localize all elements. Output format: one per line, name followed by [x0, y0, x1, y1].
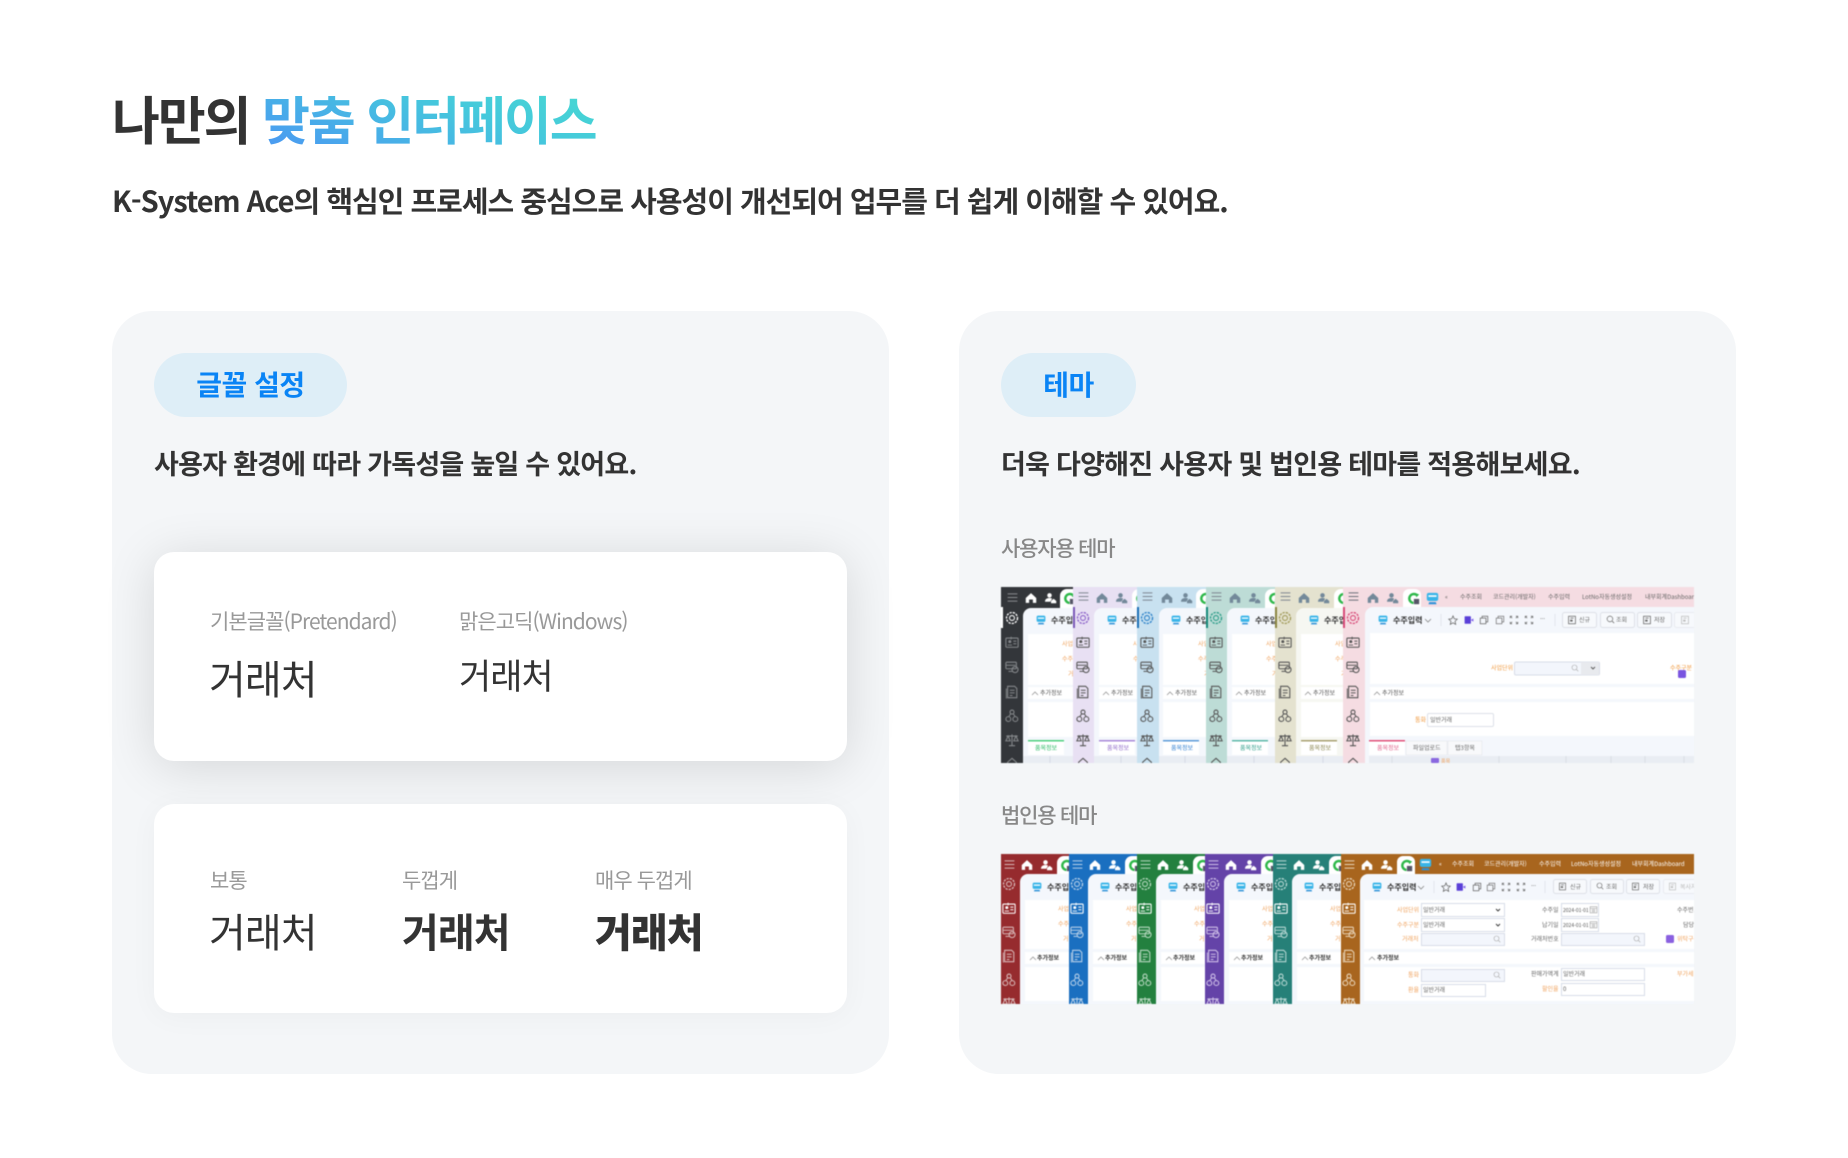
theme strip: crimson — [1001, 854, 1087, 1014]
badge: theme — [1001, 353, 1136, 417]
theme strip: green: 추가정보 — [1173, 953, 1196, 962]
window tabs: 코드관리(개발자) — [1493, 592, 1536, 601]
theme strip: mint — [1206, 587, 1295, 778]
toolbar: 신규 — [1570, 882, 1582, 891]
theme strip: mint: 사업 — [1266, 639, 1277, 648]
theme strip: dark: 추가정보 — [1040, 688, 1063, 697]
theme strip: sky blue — [1137, 587, 1226, 778]
theme strip: olive — [1275, 587, 1364, 778]
toolbar: 수주입력 — [1387, 882, 1416, 893]
description: theme: 더욱 다양해진 사용자 및 법인용 테마를 적용해보세요. — [1001, 443, 1580, 482]
theme strip: blue — [1069, 854, 1155, 1014]
window tabs: 수주조회 — [1452, 859, 1474, 868]
additional info: 판매가액계 — [1531, 969, 1559, 978]
theme strip: blue: 추가정보 — [1105, 953, 1128, 962]
description: font settings: 사용자 환경에 따라 가독성을 높일 수 있어요. — [154, 443, 637, 482]
detail tabs — [1369, 740, 1699, 765]
additional info: 할인율 — [1542, 984, 1559, 993]
screenshot stack: user themes — [1000, 586, 1694, 764]
theme strip: mint: 수주입력 — [1255, 615, 1284, 626]
theme strip: sky blue: 거 — [1204, 669, 1210, 678]
theme strip: olive: 추가정보 — [1313, 688, 1336, 697]
form card: 거래처 — [1402, 934, 1419, 943]
theme strip: crimson: 거 — [1063, 934, 1069, 943]
theme strip: mint: 거 — [1272, 669, 1278, 678]
theme strip: dark: 사업 — [1062, 639, 1073, 648]
theme strip: green — [1137, 854, 1223, 1014]
form card: 수주일 — [1542, 905, 1559, 914]
theme strip: sky blue: 추가정보 — [1175, 688, 1198, 697]
form card: 수주구분 — [1397, 920, 1420, 929]
theme strip: green: 사업 — [1194, 904, 1205, 913]
label: corporate themes: 법인용 테마 — [1001, 800, 1096, 830]
theme strip: purple: 추가정보 — [1241, 953, 1264, 962]
panel: theme — [959, 311, 1736, 1074]
theme strip: lavender: 사업 — [1133, 639, 1144, 648]
toolbar — [1373, 880, 1704, 894]
theme strip: crimson: 수주입력 — [1047, 882, 1076, 893]
label: Malgun Gothic: 맑은고딕(Windows) — [459, 606, 627, 636]
form card: 수주구분 — [1670, 663, 1693, 672]
window tabs: 코드관리(개발자) — [1484, 859, 1527, 868]
theme strip: dark: 수주입력 — [1051, 615, 1080, 626]
sample: regular: 거래처 — [209, 901, 317, 959]
theme strip: sky blue: 사업 — [1198, 639, 1209, 648]
window tabs: 수주입력 — [1539, 859, 1561, 868]
theme strip: lavender — [1073, 587, 1162, 778]
theme strip: olive: 사업 — [1335, 639, 1346, 648]
window tabs: « — [1439, 859, 1442, 868]
additional info: 부가세 — [1677, 969, 1694, 978]
form card: 납기일 — [1542, 920, 1559, 929]
theme strip: olive: 수주입력 — [1324, 615, 1353, 626]
theme strip: lavender: 품목정보 — [1107, 743, 1130, 752]
theme strip: teal: 수주입력 — [1319, 882, 1348, 893]
badge: font settings: 글꼴 설정 — [196, 364, 305, 404]
theme strip: mint: 추가정보 — [1244, 688, 1267, 697]
form card: 사업단위 — [1491, 663, 1513, 672]
theme strip: teal: 추가정보 — [1309, 953, 1332, 962]
theme strip: purple — [1205, 854, 1291, 1014]
form card — [1370, 633, 1700, 684]
window tabs: 수주조회 — [1460, 592, 1482, 601]
theme strip: teal: 사업 — [1330, 904, 1341, 913]
theme strip: purple: 수주 — [1262, 919, 1274, 928]
additional info row: 일반거래 — [1430, 715, 1452, 724]
card: font family — [154, 552, 847, 761]
window tabs: 수주입력 — [1548, 592, 1570, 601]
additional info: 통화 — [1408, 970, 1420, 979]
sample: extra bold: 거래처 — [595, 901, 703, 959]
label: default font: 기본글꼴(Pretendard) — [210, 606, 397, 636]
theme strip: crimson: 수주 — [1058, 919, 1070, 928]
sample: bold: 거래처 — [402, 901, 510, 959]
toolbar: 조회 — [1606, 882, 1617, 891]
label: bold: 두껍게 — [402, 865, 457, 895]
form card: 2024-01-01 — [1563, 907, 1589, 914]
panel: font settings — [112, 311, 889, 1074]
theme strip: teal: 거 — [1335, 934, 1341, 943]
window tabs: « — [1445, 592, 1448, 601]
detail tabs: 품목정보 — [1377, 743, 1400, 752]
detail tabs: 탭3항목 — [1455, 743, 1475, 752]
theme strip: blue: 수주 — [1126, 919, 1138, 928]
toolbar: 저장 — [1654, 615, 1666, 624]
window tabs: LotNo자동생성설정 — [1571, 859, 1621, 868]
theme strip: sky blue: 품목정보 — [1171, 743, 1194, 752]
toolbar: 신규 — [1579, 615, 1591, 624]
window tabs — [1445, 592, 1698, 601]
theme strip: lavender: 추가정보 — [1111, 688, 1134, 697]
theme strip: blue: 사업 — [1126, 904, 1137, 913]
theme strip: green: 거 — [1199, 934, 1205, 943]
additional info: 추가정보 — [1377, 953, 1400, 962]
theme strip: dark: 품목정보 — [1035, 743, 1058, 752]
theme strip: teal: 수주 — [1330, 919, 1342, 928]
theme strip: purple: 수주입력 — [1251, 882, 1280, 893]
form card: 일반거래 — [1423, 920, 1445, 929]
theme strip: green: 수주 — [1194, 919, 1206, 928]
window tabs: 내부회계Dashboard — [1632, 859, 1685, 868]
form card — [1364, 900, 1704, 949]
window tabs — [1439, 859, 1685, 868]
theme strip: lavender: 수주입력 — [1122, 615, 1151, 626]
title: 나만의 맞춤 인터페이스 — [112, 80, 596, 155]
theme strip: mint: 수주 — [1266, 654, 1278, 663]
additional info row: 추가정보 — [1382, 688, 1405, 697]
additional info: 일반거래 — [1423, 985, 1445, 994]
toolbar: 수주입력 — [1393, 615, 1422, 626]
theme strip: sky blue: 수주 — [1198, 654, 1210, 663]
additional info: 일반거래 — [1563, 969, 1585, 978]
form card: 사업단위 — [1397, 905, 1419, 914]
theme strip: olive: 거 — [1341, 669, 1347, 678]
additional info: 환율 — [1408, 985, 1420, 994]
toolbar: ··· — [1531, 881, 1536, 890]
label: extra bold: 매우 두껍게 — [595, 865, 692, 895]
form card: 2024-01-01 — [1563, 922, 1589, 929]
theme strip: brown full window — [1341, 854, 1705, 1014]
card: font weight — [154, 804, 847, 1013]
form card: 일반거래 — [1423, 905, 1445, 914]
theme strip: teal — [1273, 854, 1359, 1014]
additional info row — [1370, 687, 1700, 736]
label: regular: 보통 — [210, 865, 247, 895]
screenshot stack: corporate themes — [1000, 853, 1695, 1005]
theme strip: crimson: 사업 — [1058, 904, 1069, 913]
theme strip: dark: 수주 — [1062, 654, 1074, 663]
theme strip: pink full window — [1343, 587, 1708, 777]
theme strip: green: 수주입력 — [1183, 882, 1212, 893]
sample: Malgun Gothic: 거래처 — [459, 649, 553, 700]
toolbar — [1379, 612, 1708, 628]
sample: default font: 거래처 — [209, 648, 317, 706]
badge: theme: 테마 — [1043, 364, 1094, 404]
theme strip: purple: 사업 — [1262, 904, 1273, 913]
detail tabs: 파일업로드 — [1413, 743, 1441, 752]
theme strip: blue: 수주입력 — [1115, 882, 1144, 893]
theme strip: crimson: 추가정보 — [1037, 953, 1060, 962]
theme strip: lavender: 수주 — [1133, 654, 1145, 663]
theme strip: blue: 거 — [1131, 934, 1137, 943]
subtitle: K-System Ace의 핵심인 프로세스 중심으로 사용성이 개선되어 업무를 더 쉽게 이해할 수 있어요. — [112, 179, 1228, 221]
additional info — [1364, 952, 1704, 1001]
toolbar: 조회 — [1616, 615, 1627, 624]
toolbar: ··· — [1540, 614, 1545, 623]
theme strip: dark: 거 — [1068, 669, 1074, 678]
theme strip: mint: 품목정보 — [1240, 743, 1263, 752]
form card: 거래처번호 — [1531, 934, 1559, 943]
toolbar: 저장 — [1643, 882, 1655, 891]
window tabs: LotNo자동생성설정 — [1582, 592, 1632, 601]
theme strip: olive: 수주 — [1335, 654, 1347, 663]
theme strip: olive: 품목정보 — [1309, 743, 1332, 752]
theme strip: sky blue: 수주입력 — [1186, 615, 1215, 626]
label: user themes: 사용자용 테마 — [1001, 533, 1114, 563]
additional info row: 통화 — [1415, 715, 1427, 724]
badge: font settings — [154, 353, 347, 417]
theme strip: purple: 거 — [1267, 934, 1273, 943]
additional info: 0 — [1563, 984, 1567, 993]
theme strip: dark — [1001, 587, 1090, 778]
